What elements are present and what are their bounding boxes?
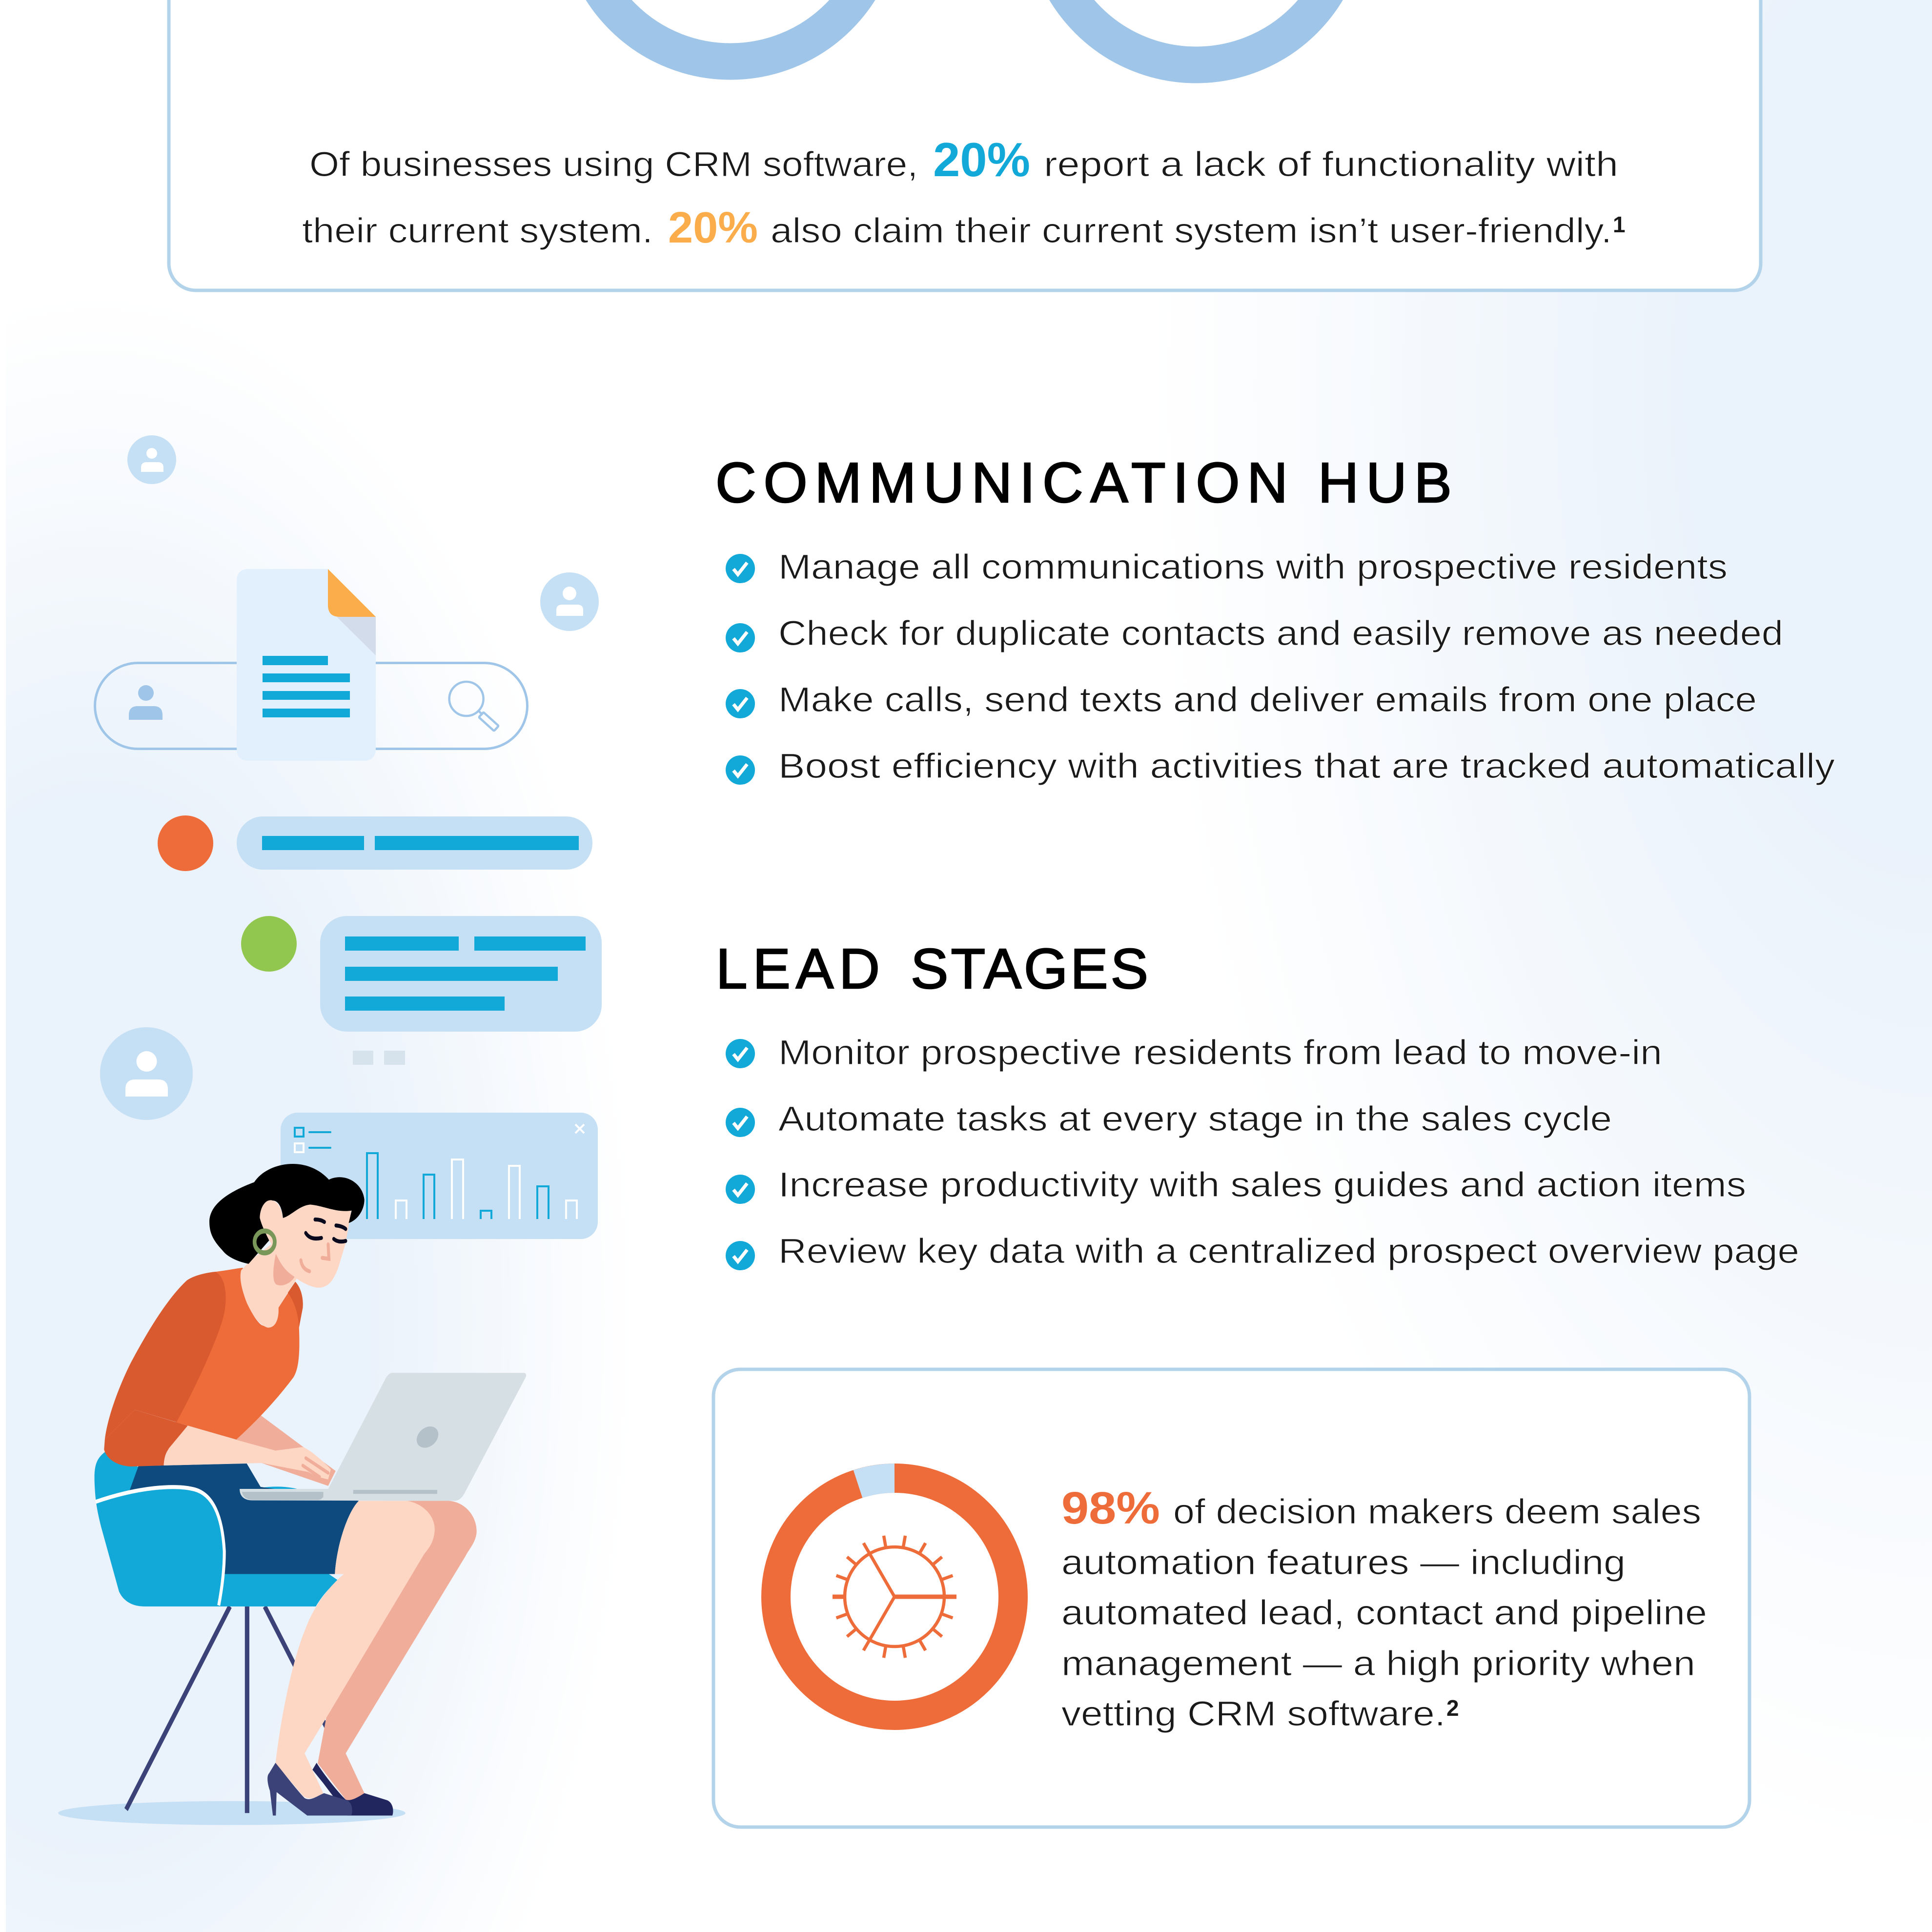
icon: right avatar xyxy=(540,572,599,631)
heading: communication hub: COMMUNICATION HUB xyxy=(715,451,1452,514)
text: 98% statistic: of decision makers deem sales xyxy=(1173,1493,1701,1531)
illustration: communication widgets xyxy=(95,435,602,1239)
fingers xyxy=(303,1458,328,1477)
list: communication hub features: Boost efficiency with activities that are tracked automatically xyxy=(778,747,1835,786)
icon: check xyxy=(726,1039,755,1068)
chart window xyxy=(281,1113,598,1239)
typing indicator xyxy=(353,1051,405,1065)
floor shadow xyxy=(58,1801,406,1825)
search bar xyxy=(95,663,527,749)
text: functionality statistic: 1 xyxy=(1613,212,1626,237)
text: 98% statistic: vetting CRM software. xyxy=(1061,1695,1445,1733)
front shoe xyxy=(267,1763,352,1815)
chair seat xyxy=(95,1452,338,1607)
nose and mouth xyxy=(301,1244,329,1271)
eyes and brows xyxy=(306,1220,346,1241)
panel: CRM functionality stats xyxy=(169,0,1761,290)
cuff xyxy=(104,1410,188,1466)
panel: sales automation statistic xyxy=(713,1369,1749,1827)
icon: check xyxy=(726,1241,755,1270)
chair legs xyxy=(126,1607,327,1813)
list: lead stages features xyxy=(726,1034,1799,1271)
chart: 98% donut xyxy=(776,1478,1013,1715)
back shoe xyxy=(312,1763,393,1815)
text: functionality statistic: their current system. xyxy=(302,212,653,250)
icon: close xyxy=(575,1124,584,1133)
back arm xyxy=(236,1415,336,1486)
earring xyxy=(255,1231,275,1253)
text: functionality statistic xyxy=(302,133,1626,252)
text: 98% statistic: management — a high priority when xyxy=(1061,1645,1695,1683)
icon: small avatar xyxy=(127,435,176,484)
message bubble: multi line xyxy=(320,916,602,1032)
list: lead stages features: Increase productivity with sales guides and action items xyxy=(778,1166,1746,1204)
front leg xyxy=(276,1501,435,1798)
list: communication hub features: Manage all communications with prospective residents xyxy=(778,548,1728,587)
text: functionality statistic: Of businesses using CRM software, xyxy=(309,145,918,184)
icon: document xyxy=(237,569,376,761)
text: functionality statistic: also claim their current system isn’t user-friendly. xyxy=(771,212,1612,250)
icon: check xyxy=(726,1108,755,1137)
text: functionality statistic: report a lack of functionality with xyxy=(1044,145,1618,184)
icon: green contact dot xyxy=(241,916,297,972)
laptop xyxy=(240,1373,526,1501)
text: functionality statistic: 20% xyxy=(668,203,758,252)
neck and chest xyxy=(241,1243,297,1328)
skirt xyxy=(129,1464,359,1574)
chart: left ring xyxy=(578,0,883,61)
icon: orange contact dot xyxy=(158,815,213,871)
bar chart xyxy=(367,1153,577,1219)
back leg xyxy=(318,1501,477,1800)
text: 98% statistic: automation features — including xyxy=(1061,1544,1626,1582)
heading: lead stages xyxy=(716,937,1148,1000)
icon: check xyxy=(726,689,755,718)
list: communication hub features: Check for duplicate contacts and easily remove as needed xyxy=(778,614,1783,653)
chart: right ring xyxy=(1043,0,1349,65)
heading: lead stages: LEAD xyxy=(716,937,880,1000)
text: 98% statistic xyxy=(1061,1483,1707,1733)
icon: gear wheel xyxy=(833,1536,956,1658)
text: functionality statistic: 20% xyxy=(933,133,1030,186)
icon: user in search bar xyxy=(129,685,163,720)
text: 98% statistic: automated lead, contact and pipeline xyxy=(1061,1594,1707,1632)
chair edge xyxy=(96,1487,224,1606)
icon: check xyxy=(726,1175,755,1204)
list: lead stages features: Monitor prospective residents from lead to move-in xyxy=(778,1034,1662,1072)
icon: check xyxy=(726,755,755,785)
hair xyxy=(209,1164,365,1264)
message bubble: single line xyxy=(237,816,592,870)
heading: lead stages: STAGES xyxy=(911,937,1148,1000)
list: communication hub features xyxy=(726,548,1835,786)
legend xyxy=(295,1128,330,1152)
icon: check xyxy=(726,623,755,652)
front arm xyxy=(164,1425,331,1480)
illustration: woman using a laptop on a chair xyxy=(58,1164,526,1825)
face xyxy=(260,1200,351,1288)
neck shadow xyxy=(273,1254,295,1285)
text: 98% statistic: 2 xyxy=(1446,1695,1459,1721)
icon: large avatar xyxy=(100,1027,193,1120)
text: 98% statistic: 98% xyxy=(1061,1483,1160,1533)
shoulder shade xyxy=(288,1282,303,1327)
sleeve xyxy=(105,1272,226,1440)
torso xyxy=(176,1268,303,1440)
icon: check xyxy=(726,554,755,583)
icon: magnifier xyxy=(449,682,499,731)
list: lead stages features: Automate tasks at every stage in the sales cycle xyxy=(778,1100,1612,1139)
list: communication hub features: Make calls, send texts and deliver emails from one place xyxy=(778,681,1757,719)
list: lead stages features: Review key data with a centralized prospect overview page xyxy=(778,1232,1799,1271)
